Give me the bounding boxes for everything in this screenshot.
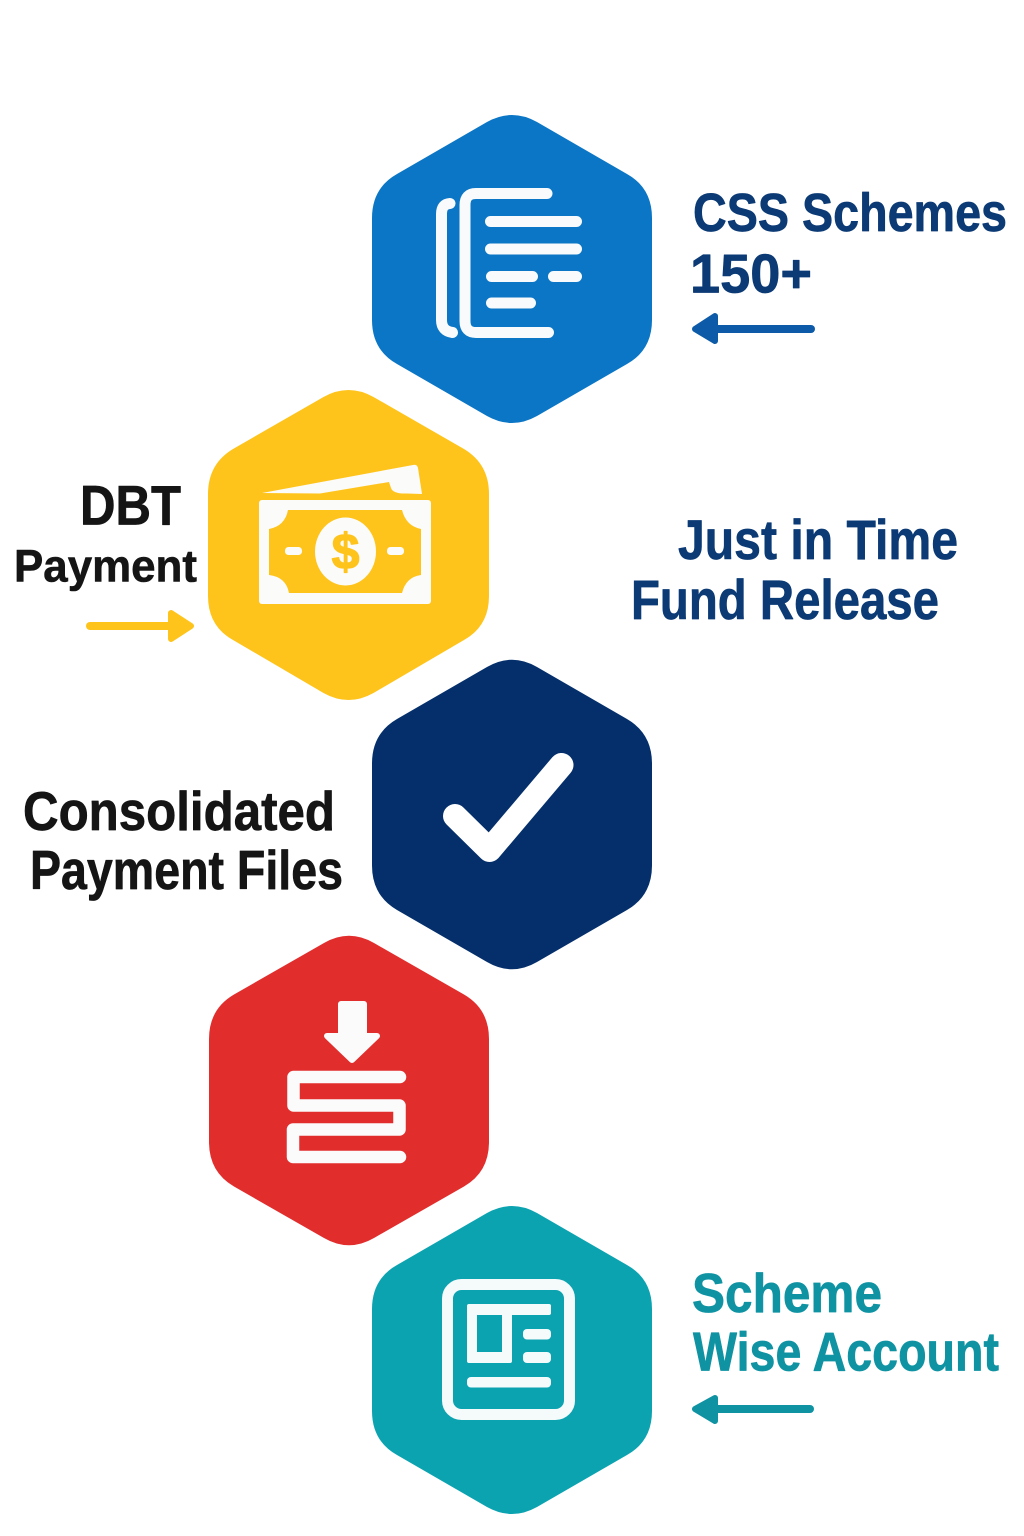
label: Scheme Wise Account [692,1262,999,1421]
label: CSS Schemes 150+ [690,183,1007,341]
hexagon: yellow [208,390,489,700]
hexagon: blue [372,115,652,423]
hexagon: teal [372,1206,652,1514]
text line: Payment Files: Payment Files [30,839,343,901]
step 4: download hexagon [209,936,489,1245]
text line: Scheme: Scheme [692,1262,882,1324]
icon: banknote [259,465,431,604]
label: Just in Time Fund Release [631,508,958,631]
number: 150+: 150+ [690,242,812,304]
step 3: Consolidated Payment Files hexagon [372,660,652,969]
step 2: DBT Payment hexagon [208,390,489,700]
arrow: left blue [695,316,811,341]
step 5: Scheme Wise Account hexagon [372,1206,652,1514]
icon: check mark [455,765,562,850]
heading: DBT: DBT [80,474,181,536]
icon: banknote: $ [332,524,360,580]
icon: documents [442,194,576,332]
text line: Just in Time: Just in Time [678,508,958,571]
label: DBT Payment [14,474,197,639]
text line: Consolidated: Consolidated [23,780,335,842]
icon: account ledger [448,1284,570,1414]
arrow: left teal [695,1398,810,1421]
label: Consolidated Payment Files [23,780,343,901]
icon: download into stack [293,1004,400,1157]
step 1: CSS Schemes hexagon [372,115,652,423]
hexagon: red [209,936,489,1245]
text line: Fund Release: Fund Release [631,568,939,631]
subheading: Payment: Payment [14,540,197,592]
arrow: right yellow [90,613,191,639]
hexagon: navy [372,660,652,969]
